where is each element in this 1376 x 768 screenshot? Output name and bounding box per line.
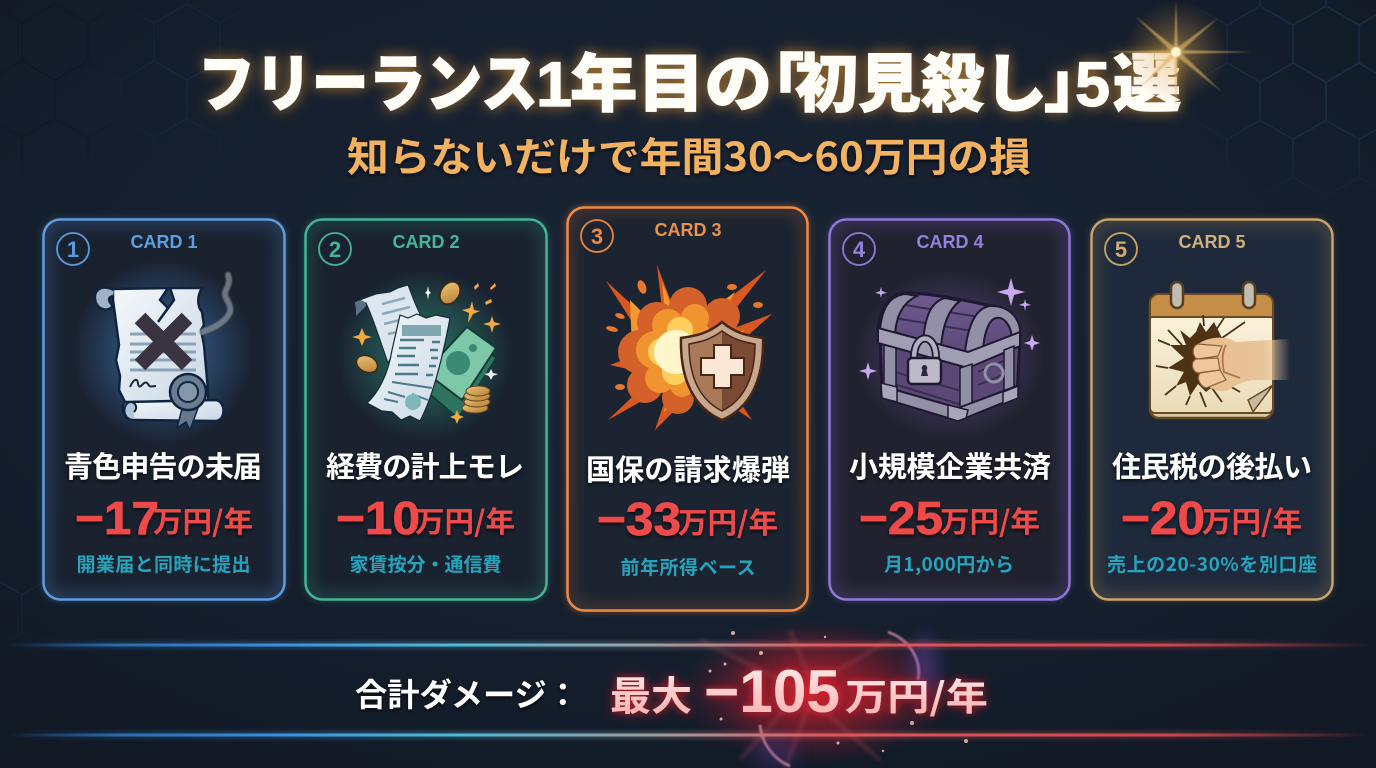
title: 1: [536, 50, 572, 120]
card 5 title: 住民税の後払い: [1112, 444, 1312, 486]
icon: star flare: [1105, 0, 1252, 115]
card 1 loss: [75, 492, 253, 544]
title: 「: [741, 34, 804, 125]
total label: 合計ダメージ：: [355, 670, 579, 716]
card 2 loss: 万円/年: [415, 499, 515, 541]
label: card 1: CARD 1: [130, 232, 198, 252]
total value: 万円/年: [845, 667, 988, 721]
card 3 title: 国保の請求爆弾: [586, 447, 790, 489]
card 4 note: 月1,000円から: [884, 550, 1014, 577]
title: 選: [1113, 34, 1181, 125]
card 1 title: 青色申告の未届: [64, 444, 262, 486]
card 3 loss: [597, 493, 778, 545]
card 2 loss: [336, 492, 515, 544]
badge: number 2: 2: [329, 237, 341, 262]
card 3 loss: 万円/年: [678, 500, 778, 542]
card 2 title: 経費の計上モレ: [326, 444, 524, 486]
panel: card 2: [305, 219, 547, 600]
title: [198, 34, 1181, 125]
title: 年目の: [570, 34, 772, 125]
icon: locked treasure chest: [855, 270, 1045, 440]
card 1 loss: −17: [75, 492, 159, 544]
title: 初見殺し: [795, 34, 1047, 125]
total value: −105: [704, 658, 840, 725]
icon: torn scroll: [73, 260, 253, 444]
icon: explosion and shield: [606, 265, 772, 430]
card 5 loss: −20: [1121, 492, 1205, 544]
burst behind total: [680, 620, 968, 768]
card 1 loss: 万円/年: [153, 499, 253, 541]
badge: number 5: 5: [1115, 237, 1127, 262]
badge: number 5: [1105, 233, 1137, 265]
card 5 note: 売上の20-30%を別口座: [1107, 550, 1317, 577]
card 3 loss: −33: [597, 493, 681, 545]
title: 」: [1044, 34, 1107, 125]
badge: number 3: [581, 220, 613, 252]
badge: number 4: [843, 233, 875, 265]
card 5 loss: [1121, 492, 1302, 544]
label: card 4: CARD 4: [916, 232, 984, 252]
divider lines: [8, 641, 1370, 739]
total value: 最大: [610, 664, 692, 722]
card 2 note: 家賃按分・通信費: [350, 550, 502, 577]
card 4 title: 小規模企業共済: [849, 444, 1051, 486]
panel: card 4: [829, 219, 1070, 600]
subtitle: 知らないだけで年間30〜60万円の損: [347, 125, 1031, 183]
badge: number 3: 3: [591, 224, 603, 249]
badge: number 1: [57, 233, 89, 265]
card 3 note: 前年所得ベース: [620, 553, 756, 580]
card 4 loss: 万円/年: [940, 499, 1040, 541]
icon: calendar punched by fist: [1150, 282, 1290, 418]
label: card 3: CARD 3: [654, 220, 722, 240]
panel: card 1: [43, 219, 285, 600]
icon: receipts and cash: [337, 270, 513, 440]
card 2 loss: −10: [336, 492, 420, 544]
panel: card 3: [567, 207, 808, 611]
badge: number 1: 1: [67, 237, 79, 262]
title: フリーランス: [198, 34, 538, 125]
label: card 5: CARD 5: [1178, 232, 1246, 252]
badge: number 4: 4: [853, 237, 866, 262]
label: card 2: CARD 2: [392, 232, 460, 252]
card 4 loss: [859, 492, 1040, 544]
badge: number 2: [319, 233, 351, 265]
title: 5: [1075, 50, 1110, 120]
card 1 note: 開業届と同時に提出: [76, 550, 250, 577]
total value: [610, 658, 988, 725]
card 5 loss: 万円/年: [1202, 499, 1302, 541]
card 4 loss: −25: [859, 492, 943, 544]
panel: card 5: [1091, 219, 1333, 600]
